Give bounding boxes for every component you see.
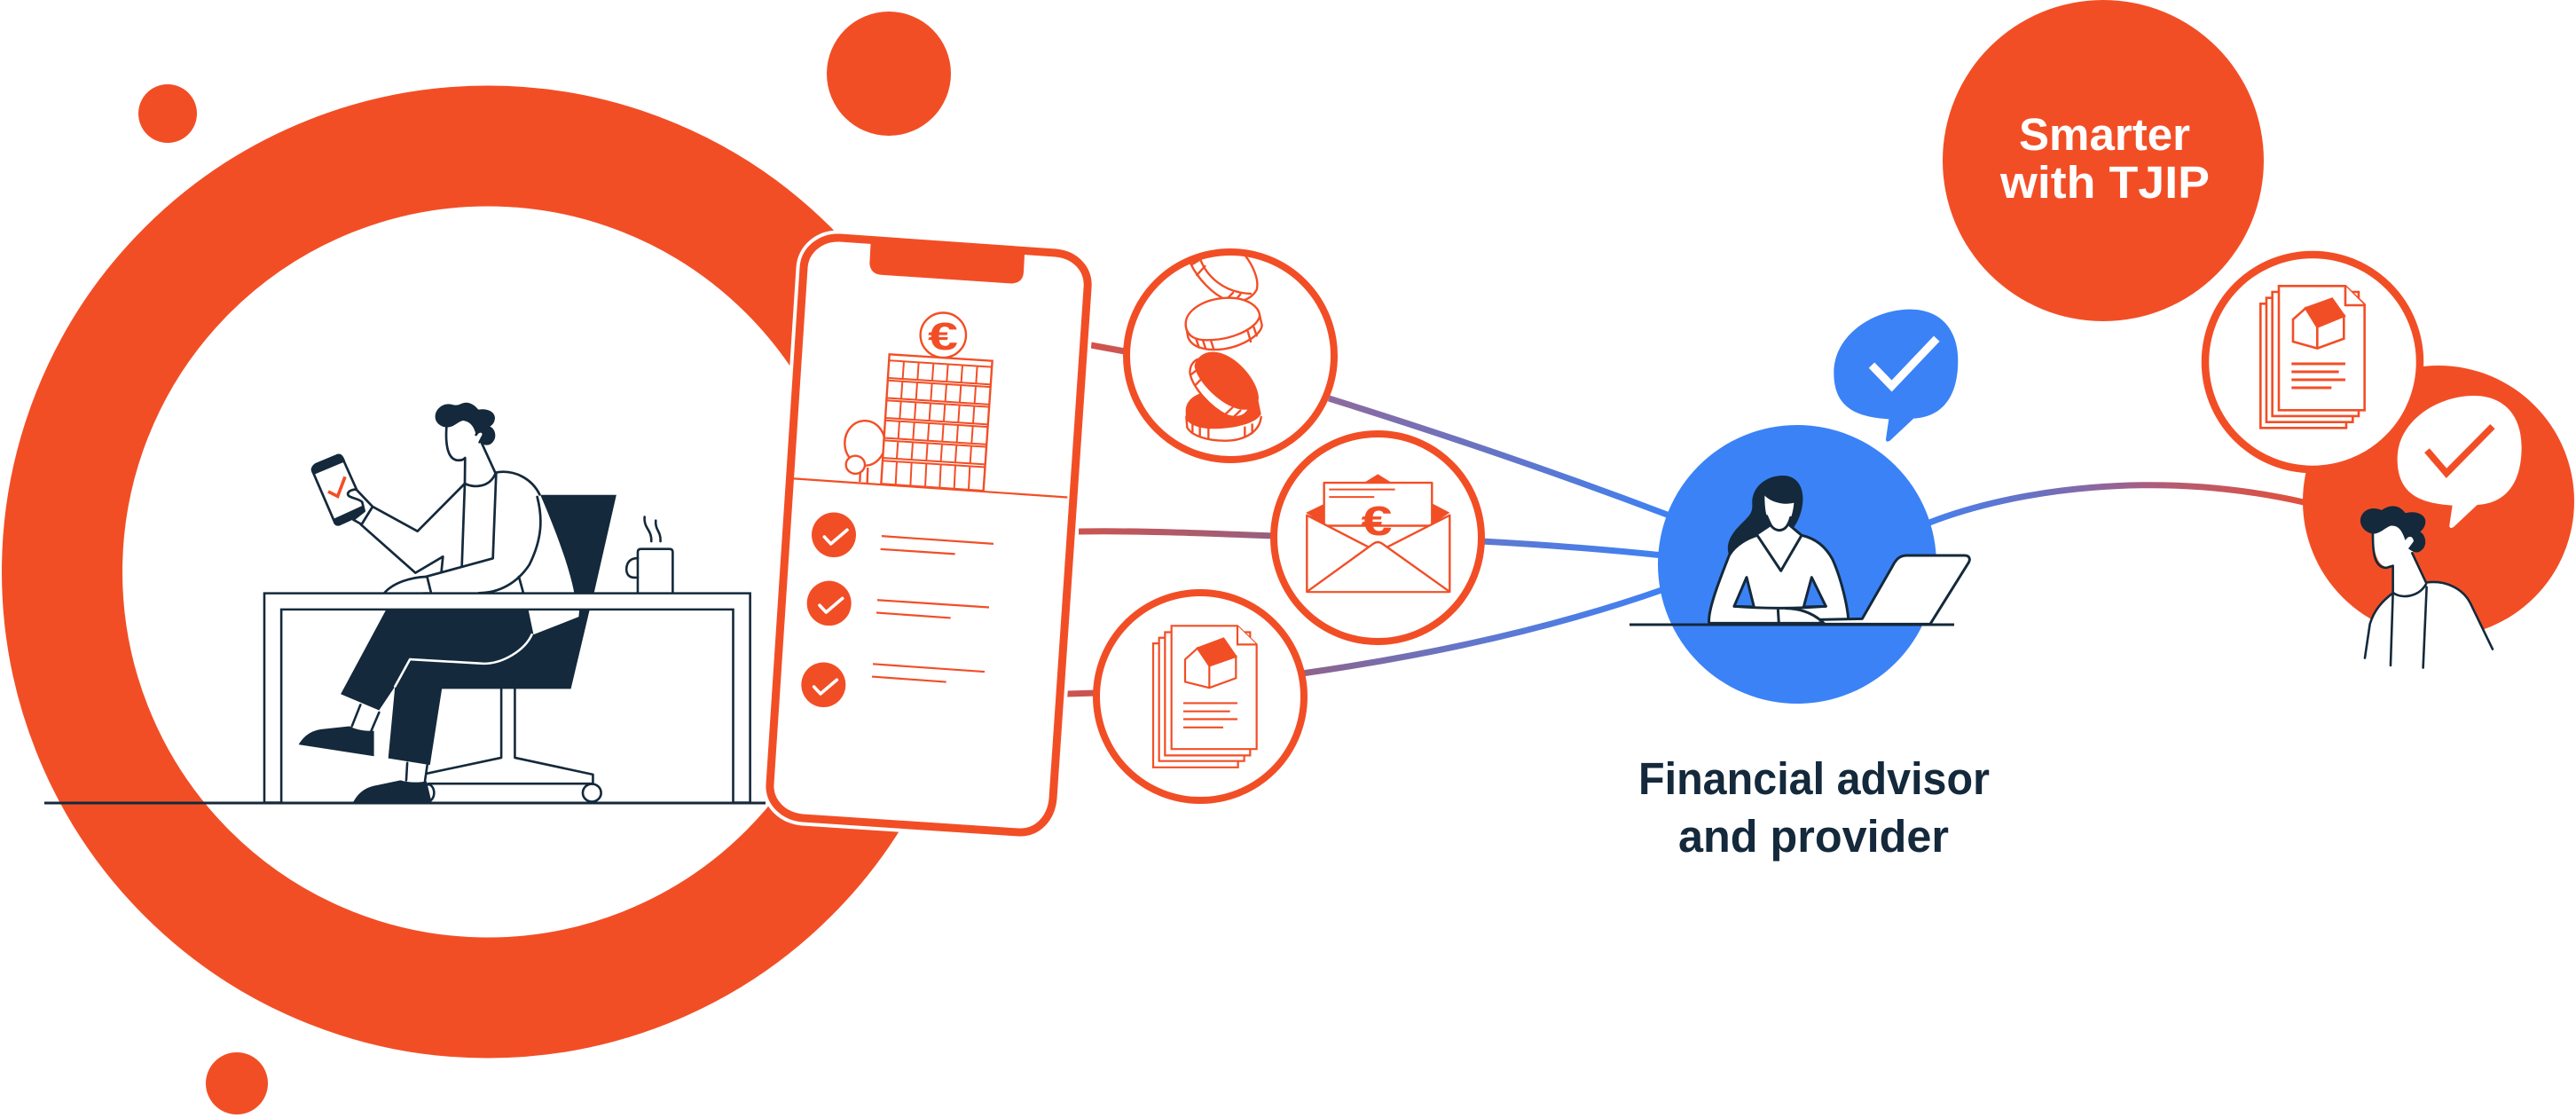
customer hair — [2360, 506, 2425, 553]
customer orange circle — [2303, 366, 2574, 637]
chair base and wheels — [422, 689, 601, 802]
chair back — [540, 495, 617, 594]
office building — [881, 354, 993, 491]
financial advisor group — [1630, 310, 1969, 704]
advisor figure at laptop — [1709, 476, 1969, 624]
circle: coins — [1127, 252, 1334, 460]
advisor hair — [1728, 476, 1802, 555]
advisor body — [1709, 535, 1849, 623]
bottom coin — [1186, 393, 1261, 441]
decorative orange ring — [62, 146, 914, 997]
icon: document stack with house — [1153, 626, 1257, 768]
icon: falling coins — [1186, 256, 1262, 441]
customer body fill — [2365, 521, 2493, 668]
badge: Smarter with TJIP: Smarter — [2019, 109, 2190, 160]
blue circle — [1658, 425, 1936, 704]
hair — [436, 403, 495, 445]
icon: document stack with house — [2260, 286, 2365, 428]
small orange dot left — [138, 84, 197, 143]
top coin — [1190, 256, 1257, 303]
advisor neck — [1757, 526, 1802, 571]
circle: property documents — [1096, 593, 1304, 800]
person at desk — [264, 403, 750, 803]
socks and shoes — [299, 705, 432, 803]
small orange dot bottom — [206, 1052, 268, 1114]
icon: envelope with euro letter — [1306, 474, 1449, 592]
phone halo — [770, 238, 1088, 832]
arm gaps — [1734, 578, 1826, 607]
advisor face — [1764, 495, 1794, 531]
advisor desk line — [1630, 623, 1954, 626]
advisor label — [1638, 753, 1990, 862]
trousers and seat — [341, 610, 590, 765]
euro sign on letter: € — [1361, 498, 1393, 544]
badge: Smarter with TJIP — [1943, 0, 2264, 321]
circle: envelope — [1274, 434, 1481, 642]
circle: customer documents — [2205, 255, 2420, 469]
laptop — [1818, 555, 1969, 624]
phone divider line — [794, 478, 1067, 498]
customer group — [2205, 255, 2574, 668]
torso and arms — [361, 444, 540, 594]
mug and desk — [264, 517, 750, 803]
coffee mug with steam — [626, 517, 672, 594]
euro sign on coin: € — [928, 315, 958, 358]
white speech bubble with check — [2398, 396, 2522, 528]
check item 1 — [812, 513, 993, 557]
floor line — [44, 802, 766, 804]
badge: Smarter with TJIP: with TJIP — [1999, 157, 2210, 208]
connector lines — [1067, 345, 2304, 694]
smartphone — [770, 238, 1088, 832]
trees — [844, 421, 885, 483]
check item 2 — [807, 581, 989, 626]
hand — [348, 490, 373, 524]
second coin — [1186, 298, 1262, 350]
euro coin — [921, 313, 966, 358]
advisor label: Financial advisor — [1638, 753, 1990, 804]
check item 3 — [801, 662, 985, 707]
phone frame — [770, 238, 1088, 832]
phone notch — [869, 241, 1025, 283]
upper body with phone — [312, 403, 540, 594]
small orange dot top — [827, 12, 951, 136]
lower body, chair — [299, 495, 617, 803]
tilted filled coin — [1190, 352, 1259, 417]
desk — [264, 594, 750, 803]
ear — [476, 431, 483, 442]
blue speech bubble with check — [1834, 310, 1958, 442]
phone content — [794, 241, 1067, 707]
customer outlines — [2365, 534, 2493, 668]
head — [446, 428, 465, 484]
customer figure — [2360, 506, 2493, 668]
advisor label: and provider — [1678, 811, 1949, 862]
handheld phone with check — [312, 455, 365, 524]
